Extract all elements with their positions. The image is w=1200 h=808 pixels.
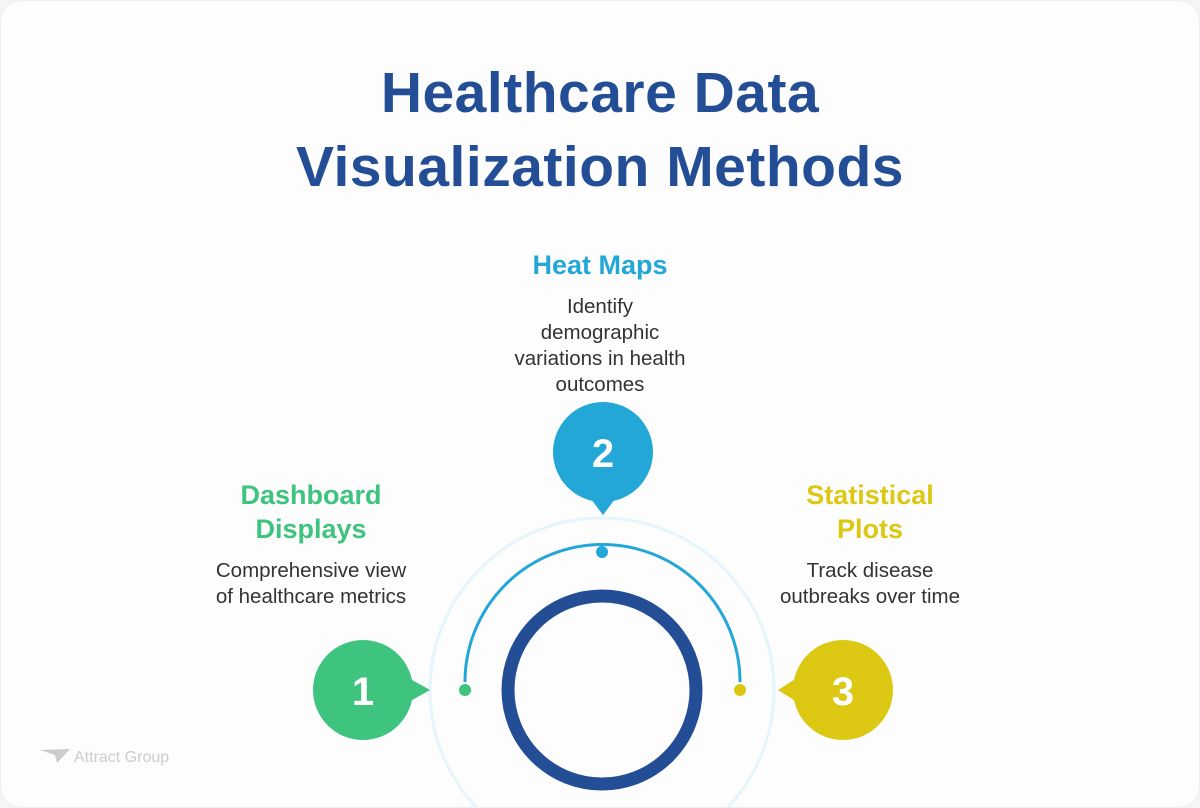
text: dashboard description: of healthcare metrics [216,585,406,608]
heading: statistical plots: Plots [837,514,903,544]
bubble 3 [778,640,893,740]
text: heat maps description: Identify [567,295,633,318]
bubble 3: 3 [832,670,854,714]
text: dashboard description [216,559,406,608]
heading: dashboard displays: Dashboard [240,480,382,510]
bubble 1 [313,640,430,740]
blue arc [465,544,740,682]
text: heat maps description: demographic [541,321,659,344]
heading: statistical plots [806,480,934,544]
heading: heat maps: Heat Maps [532,250,668,280]
bubble 2: 2 [592,432,614,476]
title [296,61,904,199]
bubble 2 [553,402,653,515]
logo: Attract Group [74,749,169,766]
text: statistical description: Track disease [807,559,933,582]
bubble 1: 1 [352,670,374,714]
title: Healthcare Data [381,61,819,125]
text: statistical description: outbreaks over time [780,585,960,608]
text: heat maps description [514,295,685,396]
text: statistical description [780,559,960,608]
heading: dashboard displays [240,480,382,544]
dots [459,546,746,696]
heading: dashboard displays: Displays [255,514,367,544]
dark ring [508,596,696,784]
heading: statistical plots: Statistical [806,480,934,510]
outer faint circle [430,518,774,808]
title: Visualization Methods [296,135,904,199]
text: heat maps description: outcomes [556,373,644,396]
text: dashboard description: Comprehensive view [216,559,406,582]
text: heat maps description: variations in health [515,347,685,370]
